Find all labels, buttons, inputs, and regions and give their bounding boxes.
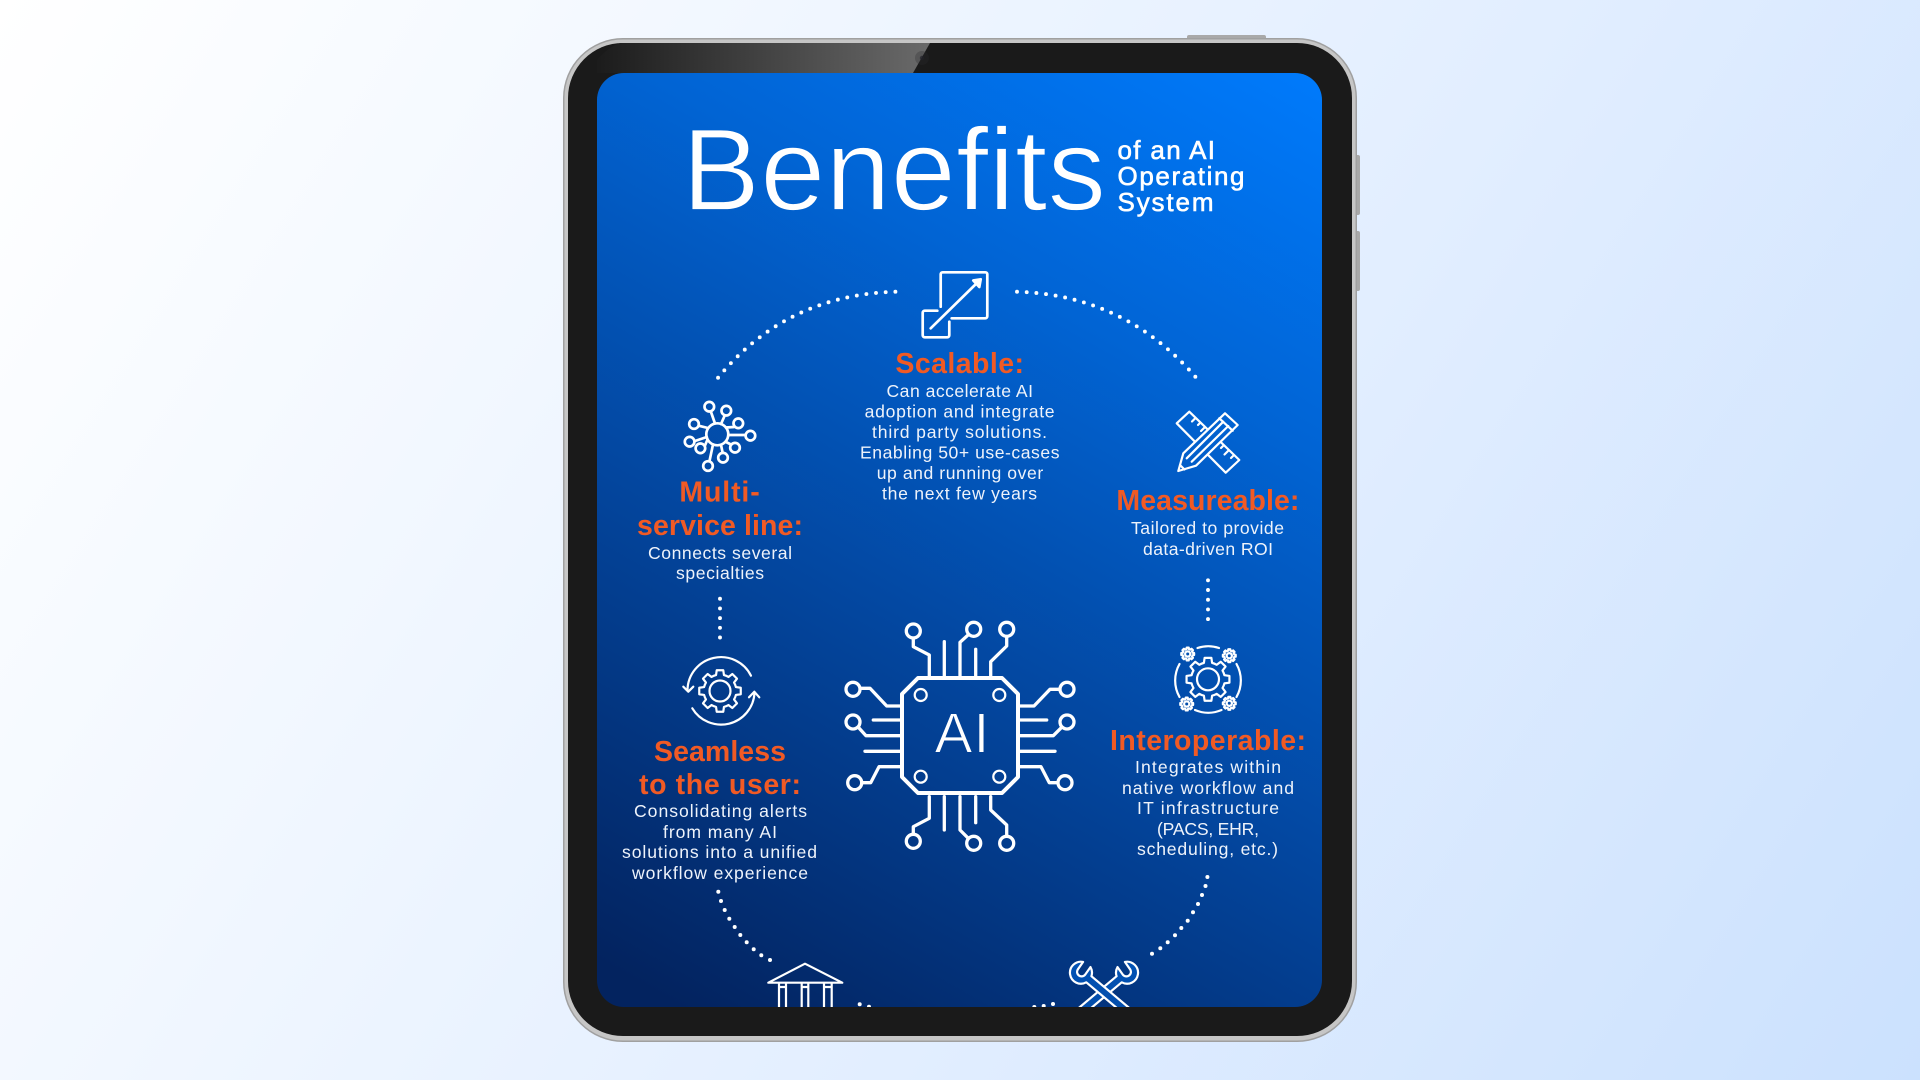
text: Scalable description: third party solutions.: [872, 422, 1047, 442]
chip circuit traces: [846, 622, 1074, 850]
icon: gears cluster: [1175, 646, 1241, 713]
dotted connector: left vertical: [718, 599, 722, 638]
icon: network nodes: [685, 402, 755, 471]
dotted connector: top left arc: [717, 292, 895, 379]
heading: Scalable: Scalable:: [895, 348, 1024, 380]
text: Interoperable description: scheduling, etc.): [1137, 839, 1278, 859]
text: Scalable description: Enabling 50+ use-cases: [860, 442, 1060, 462]
text: Interoperable description: [1122, 757, 1294, 859]
panel: Interoperable: [1110, 646, 1306, 859]
text: Measureable description: Tailored to provide: [1131, 518, 1284, 538]
text: Multi-service description: specialties: [676, 563, 764, 583]
text: Multi-service description: [648, 543, 792, 583]
text: Seamless description: [622, 801, 817, 883]
chip corner contacts: [915, 689, 1005, 783]
icon: gear with circular arrows: [683, 657, 759, 725]
panel: Seamless to the user: [622, 657, 817, 883]
text: Scalable description: Can accelerate AI: [886, 381, 1033, 401]
text: Seamless description: workflow experience: [631, 863, 808, 883]
dotted connector: bottom right arc: [1150, 875, 1209, 956]
icon: crossed wrenches: [1068, 960, 1140, 1007]
icon: AI chip: [846, 622, 1074, 850]
chip label: AI: [934, 702, 989, 766]
subtitle: System: [1118, 187, 1214, 217]
dotted connector: right vertical: [1206, 580, 1210, 620]
tablet device frame: [563, 35, 1360, 1042]
subtitle: Operating: [1118, 161, 1244, 191]
icon: scale arrow: [923, 272, 987, 337]
heading: Measureable: Measureable:: [1116, 485, 1299, 517]
panel: Measureable: [1116, 412, 1299, 559]
heading: Interoperable: Interoperable:: [1110, 725, 1306, 757]
text: Seamless description: Consolidating alerts: [634, 801, 807, 821]
icon: institution building: [768, 964, 842, 1012]
panel: Multi-service line: [637, 402, 803, 583]
dotted connector: bottom centre: [858, 1002, 1055, 1007]
infographic scene: [563, 35, 1360, 1042]
dotted connector: bottom left arc: [716, 890, 772, 962]
text: Scalable description: adoption and integrate: [865, 402, 1055, 422]
text: Scalable description: up and running over: [877, 463, 1043, 483]
heading: Multi-service line: service line:: [637, 510, 803, 542]
text: Measureable description: [1131, 521, 1284, 555]
panel: Scalable: [860, 272, 1060, 504]
heading: Seamless to the user: Seamless: [654, 736, 786, 768]
text: Multi-service description: Connects several: [648, 543, 792, 563]
subtitle: [1118, 135, 1244, 217]
text: Seamless description: solutions into a unified: [622, 842, 817, 862]
dotted connector: top right arc: [1017, 292, 1199, 381]
text: Measureable description: data-driven ROI: [1143, 539, 1273, 559]
text: Scalable description: [860, 381, 1060, 504]
text: Interoperable description: native workflow and: [1122, 778, 1294, 798]
heading: Multi-service line: Multi-: [679, 477, 760, 509]
chip body: [902, 678, 1018, 793]
text: Scalable description: the next few years: [882, 484, 1037, 504]
heading: Multi-service line: [638, 480, 800, 536]
heading: Seamless to the user: [639, 740, 798, 794]
text: Interoperable description: Integrates within: [1135, 757, 1281, 777]
heading: Seamless to the user: to the user:: [639, 769, 801, 801]
text: Interoperable description: IT infrastructure: [1137, 798, 1279, 818]
text: Interoperable description: (PACS, EHR,: [1157, 819, 1259, 839]
tablet screen: [597, 73, 1322, 1029]
icon: pencil and ruler: [1177, 412, 1239, 473]
title: Benefits: Benefits: [682, 104, 1106, 235]
subtitle: of an AI: [1118, 135, 1215, 165]
text: Seamless description: from many AI: [663, 822, 777, 842]
